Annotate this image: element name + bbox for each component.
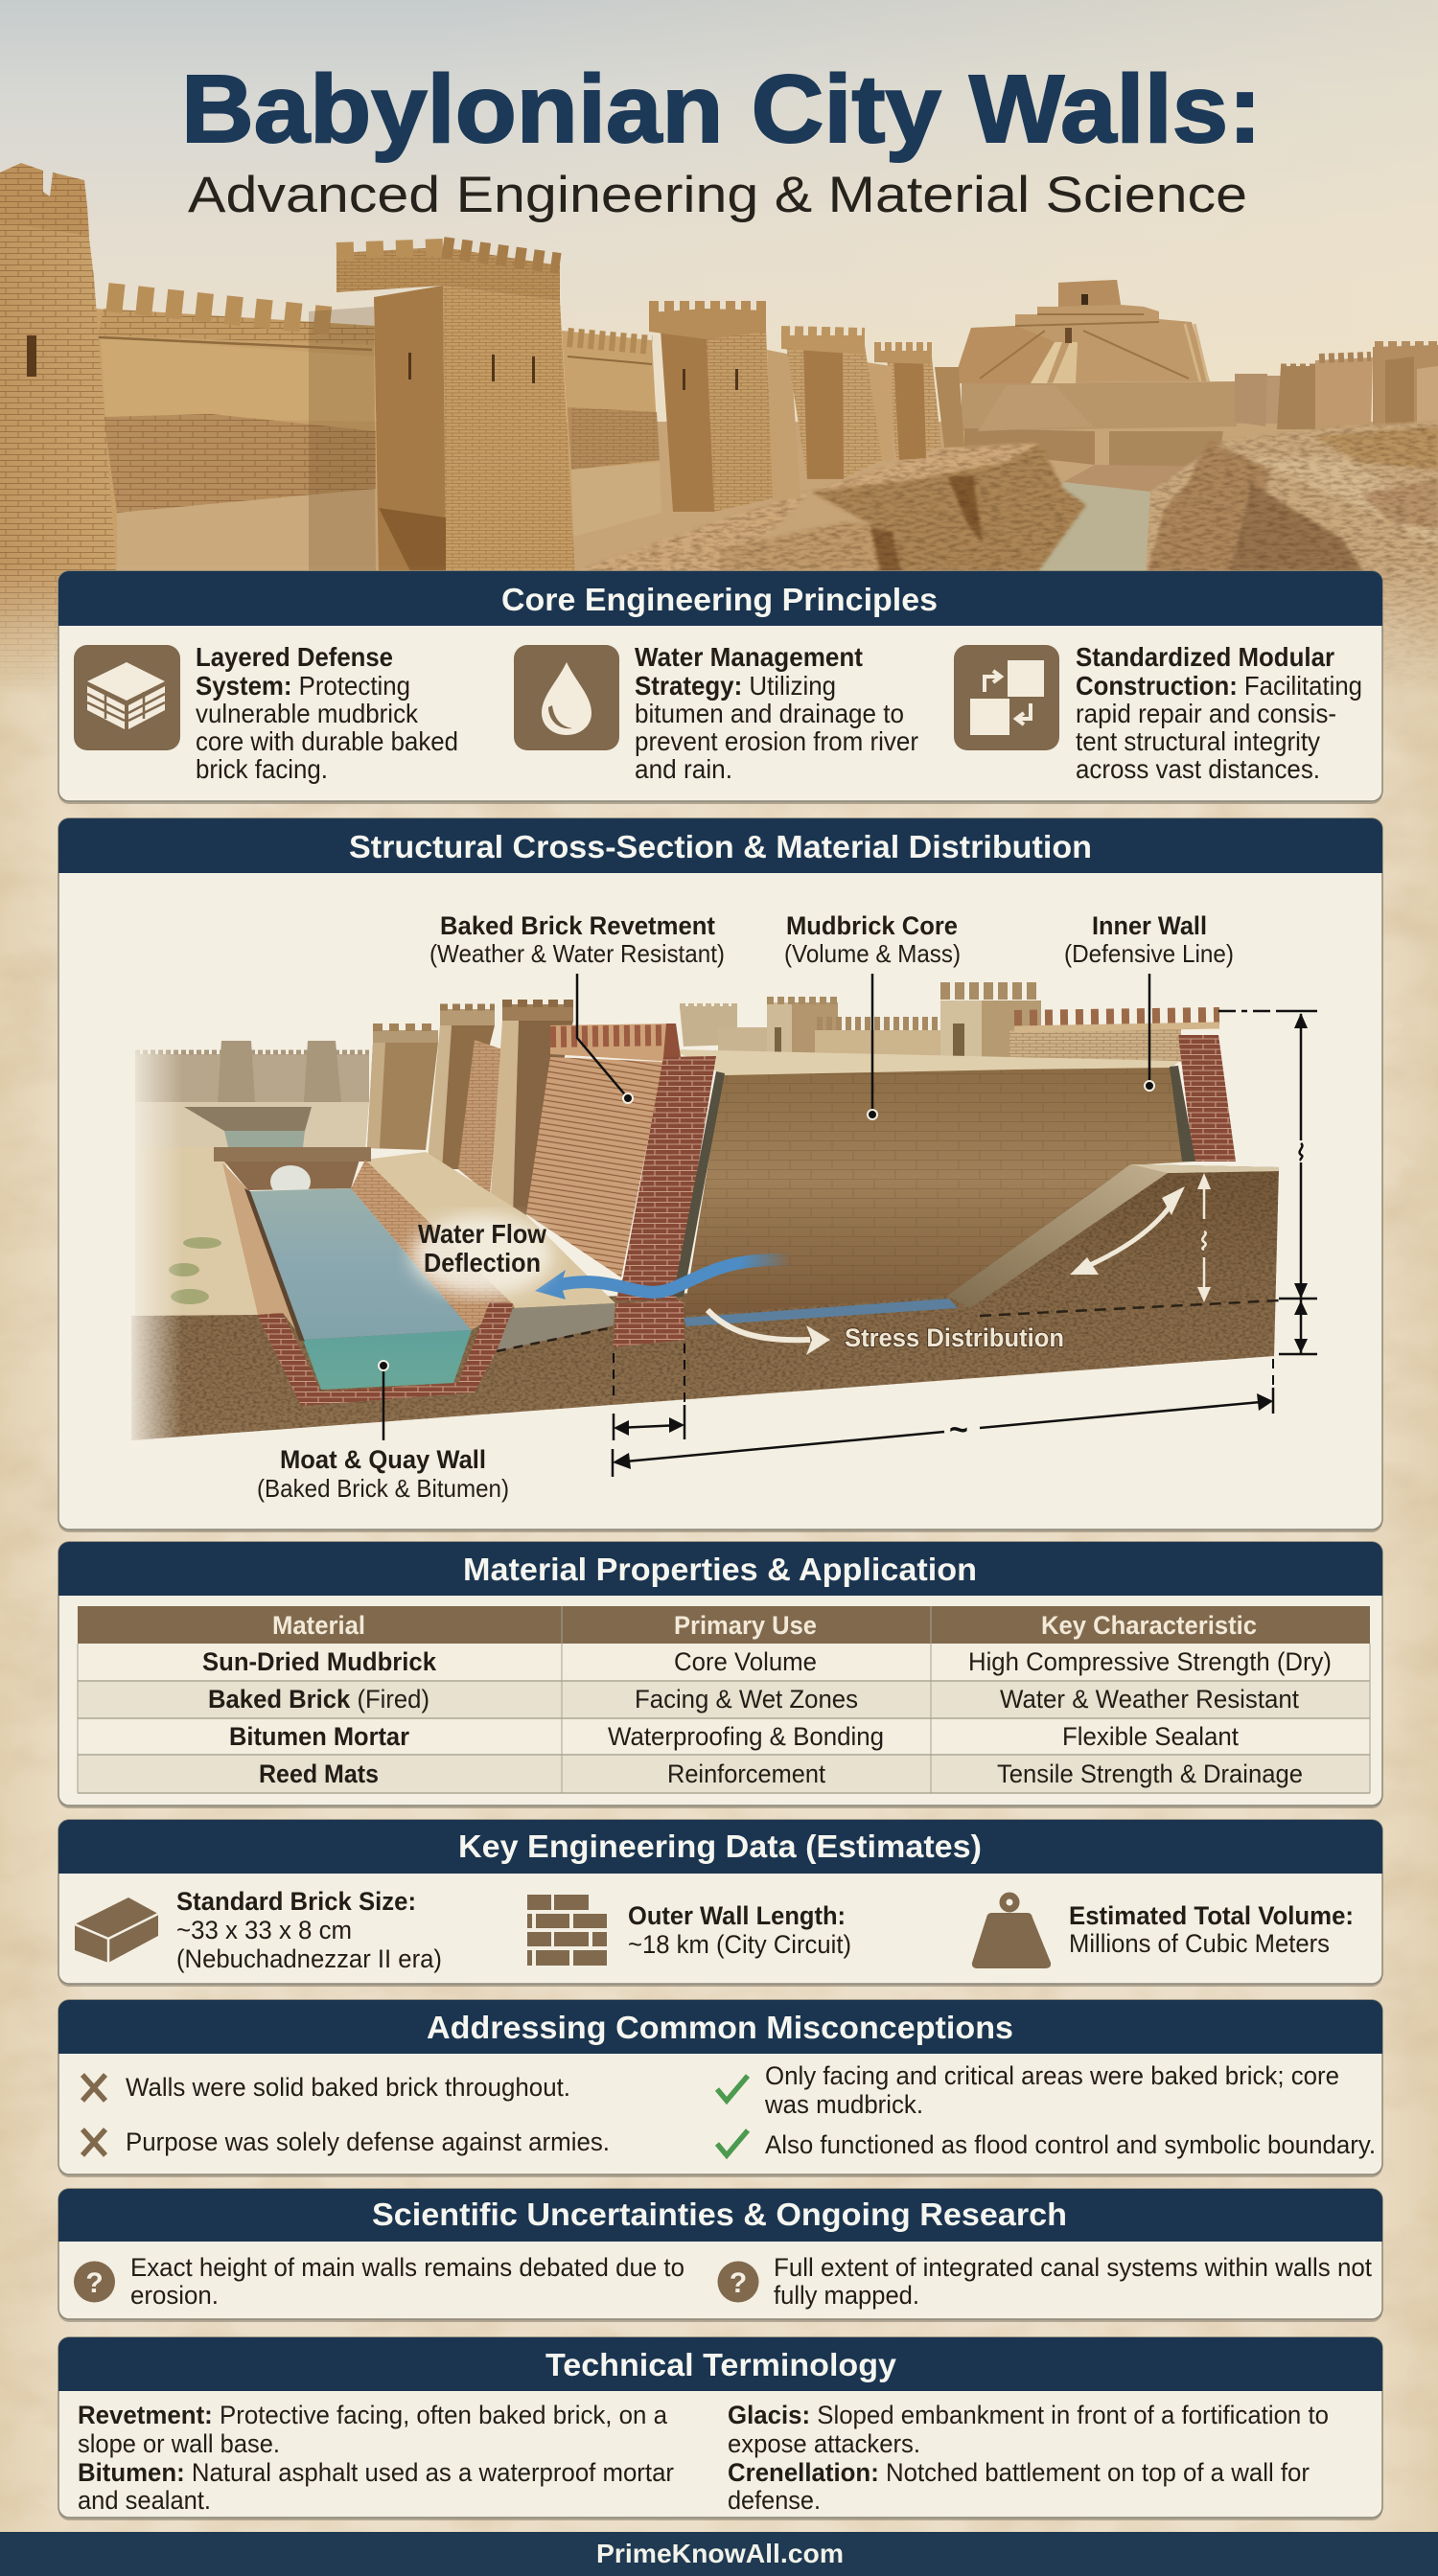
moat water cross-section [303, 1330, 472, 1390]
dimension symbol: ~ [949, 1412, 968, 1448]
table header row: Material [272, 1611, 365, 1640]
hero illustration: Babylonian walls, ziggurat and moat [0, 0, 1438, 709]
tower 4 with connecting wall [767, 332, 893, 500]
moat banks [222, 1160, 515, 1342]
heading: Addressing Common Misconceptions [427, 2010, 1013, 2045]
terms: revetment and bitumen: slope or wall base. [78, 2429, 280, 2458]
dimension: wall widths [613, 1344, 1273, 1477]
terms: revetment and bitumen: and sealant. [78, 2486, 211, 2515]
materials table [78, 1606, 1370, 1793]
label: water flow deflection: Water Flow [418, 1219, 546, 1249]
table header row: Key Characteristic [1041, 1611, 1257, 1640]
text: layered defense: System: Protecting [196, 671, 410, 701]
core top surface [671, 1049, 1180, 1075]
text: layered defense: brick facing. [196, 754, 328, 784]
arrow: stress distribution [707, 1310, 830, 1355]
tower 3 with connecting wall [562, 307, 773, 537]
table row: bitumen mortar: Waterproofing & Bonding [608, 1722, 884, 1751]
table header row [272, 1611, 1257, 1640]
datum dashes [980, 1300, 1279, 1316]
tower 2 [336, 247, 575, 575]
inner wall brick [1170, 1035, 1236, 1162]
label: baked brick revetment: Baked Brick Revetment [440, 911, 715, 940]
table row: sun-dried mudbrick: Core Volume [674, 1647, 817, 1676]
title: Advanced Engineering & Material Science [188, 167, 1247, 223]
fact: flood control: Also functioned as flood control and symbolic boundary. [765, 2130, 1376, 2159]
text: standardized modular construction: Construction: Facilitating [1076, 671, 1362, 701]
baked brick revetment [526, 1024, 725, 1347]
footer [0, 2532, 1438, 2576]
distant left wall [135, 1041, 369, 1150]
grey foundation [497, 1303, 615, 1351]
mudbrick core [684, 1067, 1194, 1316]
leader: baked brick revetment [577, 974, 633, 1103]
label: baked brick revetment: (Weather & Water Resistant) [429, 939, 725, 968]
text: standardized modular construction: rapid repair and consis- [1076, 699, 1336, 728]
heading: Key Engineering Data (Estimates) [458, 1828, 982, 1864]
text: estimated total volume: Millions of Cubic Meters [1069, 1929, 1330, 1958]
table row: baked brick: Baked Brick (Fired) [208, 1685, 429, 1714]
glacis slope [947, 1164, 1279, 1308]
panel: misconceptions [58, 2000, 1382, 2177]
panel: key engineering data [58, 1820, 1382, 1987]
text: outer wall length: Outer Wall Length: [628, 1901, 846, 1930]
text: outer wall length: ~18 km (City Circuit) [628, 1930, 851, 1959]
terms: glacis and crenellation [728, 2401, 1329, 2515]
moat water [1033, 482, 1150, 575]
table row: reed mats: Reed Mats [259, 1760, 379, 1788]
text: layered defense: core with durable baked [196, 726, 458, 756]
distant right city towers [680, 991, 1219, 1062]
label: baked brick revetment [429, 911, 725, 968]
heading: Material Properties & Application [463, 1552, 977, 1587]
myth: solid brick: Walls were solid baked brick throughout. [126, 2073, 570, 2102]
text: standardized modular construction: Standardized Modular [1076, 642, 1334, 672]
footer: PrimeKnowAll.com [596, 2539, 844, 2568]
label: stress distribution: Stress Distribution [845, 1323, 1064, 1352]
uncertainty: wall height: Exact height of main walls remains debated due to [130, 2253, 684, 2282]
uncertainty: canal systems: Full extent of integrated canal systems within walls not [774, 2253, 1372, 2282]
table row: bitumen mortar: Bitumen Mortar [229, 1722, 409, 1751]
terms: glacis and crenellation: Glacis: Sloped embankment in front of a fortification to [728, 2401, 1329, 2429]
heading: Scientific Uncertainties & Ongoing Research [372, 2196, 1067, 2232]
label halo [411, 1215, 553, 1296]
text: outer wall length [628, 1901, 851, 1959]
uncertainty: wall height [130, 2253, 684, 2310]
terms: revetment and bitumen [78, 2401, 674, 2515]
brick moat channel [258, 1301, 513, 1406]
table row: bitumen mortar [229, 1722, 1240, 1751]
label: water flow deflection [418, 1219, 546, 1277]
text: standard brick size: Standard Brick Size: [176, 1887, 416, 1916]
title: Babylonian City Walls: [181, 56, 1262, 163]
panel: material properties [58, 1542, 1382, 1808]
icon: brick wall [527, 1895, 607, 1966]
label: mudbrick core [784, 911, 961, 968]
label: inner wall [1064, 911, 1234, 968]
uncertainty: canal systems: fully mapped. [774, 2281, 919, 2310]
text: water management: prevent erosion from river [635, 726, 918, 756]
left ground [135, 1147, 258, 1316]
table row: sun-dried mudbrick: Sun-Dried Mudbrick [202, 1647, 436, 1676]
heading: Technical Terminology [545, 2347, 897, 2382]
moat water surface [250, 1188, 472, 1340]
table row: baked brick [208, 1685, 1300, 1714]
arrow: glacis height [1197, 1173, 1211, 1302]
arrow head: water flow [535, 1270, 566, 1300]
walkway [365, 1152, 615, 1308]
label: moat and quay wall: Moat & Quay Wall [280, 1445, 486, 1474]
text: standardized modular construction: across vast distances. [1076, 754, 1320, 784]
fact: facing only: was mudbrick. [764, 2090, 923, 2119]
label: moat and quay wall [257, 1445, 509, 1503]
icon: check [717, 2130, 748, 2155]
rear towers left of revetment [367, 1003, 573, 1215]
text: water management: bitumen and drainage to [635, 699, 904, 728]
icon: layered bricks [74, 645, 180, 750]
panel: core engineering principles [58, 571, 1382, 804]
title [181, 56, 1262, 223]
icon: question mark: ? [730, 2267, 747, 2299]
arrow: glacis stress [1070, 1186, 1185, 1275]
text: standard brick size: ~33 x 33 x 8 cm [176, 1916, 352, 1944]
label: mudbrick core: (Volume & Mass) [784, 939, 961, 968]
myth: solely defense: Purpose was solely defense against armies. [126, 2128, 610, 2156]
icon: question mark [74, 2262, 115, 2302]
label: moat and quay wall: (Baked Brick & Bitumen) [257, 1474, 509, 1503]
table row: sun-dried mudbrick: High Compressive Strength (Dry) [968, 1647, 1332, 1676]
label: mudbrick core: Mudbrick Core [786, 911, 958, 940]
text: water management: and rain. [635, 754, 732, 784]
label: inner wall: (Defensive Line) [1064, 939, 1234, 968]
table row: bitumen mortar: Flexible Sealant [1062, 1722, 1240, 1751]
text: layered defense: Layered Defense [196, 642, 393, 672]
icon: question mark: ? [85, 2267, 104, 2299]
text: layered defense [196, 642, 458, 784]
dimension: total height [1218, 1011, 1317, 1354]
text: layered defense: vulnerable mudbrick [196, 699, 419, 728]
table row: reed mats: Reinforcement [667, 1760, 826, 1788]
bridge and arch [214, 1147, 371, 1198]
tower 5 [874, 347, 941, 460]
heading: Structural Cross-Section & Material Distribution [349, 829, 1092, 864]
table row: reed mats: Tensile Strength & Drainage [997, 1760, 1303, 1788]
leader: inner wall [1145, 974, 1154, 1091]
leader: mudbrick core [868, 974, 877, 1119]
text: estimated total volume [1069, 1901, 1354, 1958]
text: standardized modular construction [1076, 642, 1362, 784]
icon: check [717, 2076, 748, 2101]
right bank and cliffs [1147, 422, 1438, 665]
table row: baked brick: Water & Weather Resistant [1000, 1685, 1300, 1714]
panel: scientific uncertainties [58, 2189, 1382, 2322]
fact: facing only: Only facing and critical areas were baked brick; core [765, 2061, 1339, 2090]
right wall towers [1235, 345, 1438, 441]
curtain wall left [96, 297, 376, 575]
tower 6 [935, 367, 964, 448]
icon: modular blocks [954, 645, 1059, 750]
terms: revetment and bitumen: Revetment: Protective facing, often baked brick, on a [78, 2401, 668, 2429]
tower 1 far left [0, 163, 120, 700]
left fade [125, 1040, 182, 1447]
table row: sun-dried mudbrick [202, 1647, 1332, 1676]
text: water management [635, 642, 918, 784]
uncertainty: wall height: erosion. [130, 2281, 219, 2310]
ziggurat [953, 280, 1210, 383]
icon: water drop [514, 645, 619, 750]
panel: technical terminology [58, 2337, 1382, 2520]
terms: glacis and crenellation: defense. [728, 2486, 821, 2515]
icon: brick [75, 1898, 158, 1963]
parchment background [0, 575, 1438, 2576]
text: water management: Strategy: Utilizing [635, 671, 836, 701]
text: standardized modular construction: tent structural integrity [1076, 726, 1320, 756]
label: inner wall: Inner Wall [1092, 911, 1207, 940]
table header row: Primary Use [674, 1611, 817, 1640]
icon: cross [82, 2075, 105, 2101]
heading: Core Engineering Principles [501, 582, 938, 617]
cross-section diagram [125, 911, 1317, 1503]
table row: reed mats [259, 1760, 1303, 1788]
table row: baked brick: Facing & Wet Zones [635, 1685, 858, 1714]
terms: glacis and crenellation: Crenellation: Notched battlement on top of a wall for [728, 2458, 1310, 2487]
fact: facing only [764, 2061, 1339, 2119]
grass tufts [169, 1237, 221, 1304]
icon: question mark [717, 2262, 759, 2302]
icon: weight [972, 1896, 1051, 1968]
text: water management: Water Management [635, 642, 863, 672]
text: standard brick size: (Nebuchadnezzar II era) [176, 1944, 442, 1973]
panel: structural cross-section [58, 818, 1382, 1532]
soil section [131, 1164, 1279, 1440]
uncertainty: canal systems [774, 2253, 1372, 2310]
leader: moat [379, 1361, 388, 1440]
left terrace and cliff [566, 443, 1086, 575]
terms: revetment and bitumen: Bitumen: Natural asphalt used as a waterproof mortar [78, 2458, 674, 2487]
text: estimated total volume: Estimated Total Volume: [1069, 1901, 1354, 1930]
label: water flow deflection: Deflection [424, 1248, 541, 1277]
icon: cross [82, 2129, 105, 2155]
drain channel [684, 1299, 958, 1326]
hero ground [0, 381, 1438, 709]
text: standard brick size [176, 1887, 442, 1973]
terms: glacis and crenellation: expose attackers. [728, 2429, 920, 2458]
arrow: water flow deflection [558, 1260, 791, 1292]
